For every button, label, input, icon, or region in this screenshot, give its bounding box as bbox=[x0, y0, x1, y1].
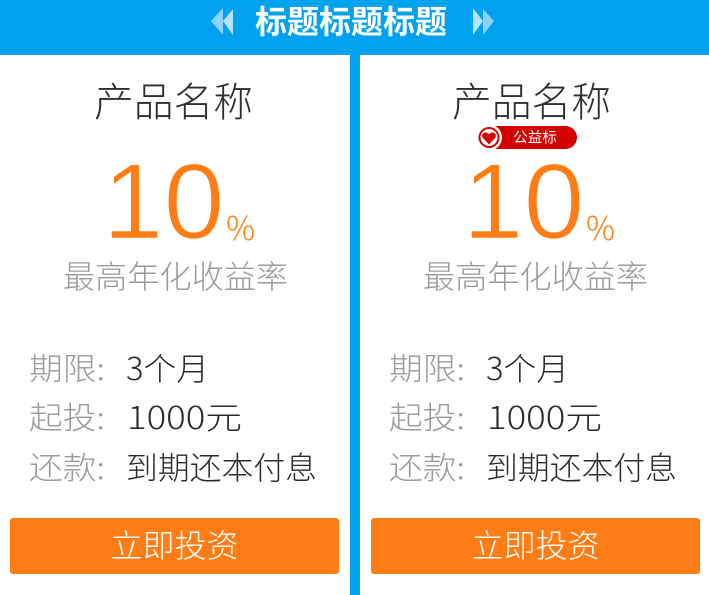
minimum investment row: 1000元 bbox=[487, 393, 602, 439]
rate value: 10 bbox=[102, 140, 224, 262]
product name: 产品名称 bbox=[452, 70, 611, 128]
percent sign: % bbox=[586, 202, 615, 250]
repayment row: 还款: bbox=[29, 443, 105, 488]
repayment row bbox=[29, 443, 317, 489]
minimum investment row: 起投: bbox=[389, 393, 465, 438]
percent sign: % bbox=[226, 202, 255, 250]
minimum investment row bbox=[29, 393, 242, 439]
center divider bbox=[350, 55, 360, 595]
rate caption: 最高年化收益率 bbox=[423, 252, 648, 298]
minimum investment row: 1000元 bbox=[127, 393, 242, 439]
icon: right double arrow bbox=[473, 8, 494, 35]
term row bbox=[389, 344, 569, 390]
icon: heart bbox=[482, 132, 496, 144]
term row bbox=[29, 344, 209, 390]
product name: 产品名称 bbox=[94, 70, 253, 128]
repayment row bbox=[389, 443, 677, 489]
minimum investment row bbox=[389, 393, 602, 439]
icon: left double arrow bbox=[211, 8, 233, 35]
term row: 期限: bbox=[29, 344, 105, 389]
repayment row: 到期还本付息 bbox=[126, 443, 317, 489]
rate value: 10 bbox=[462, 140, 584, 262]
panel: right product bbox=[371, 70, 700, 574]
invest button bbox=[371, 518, 700, 574]
repayment row: 到期还本付息 bbox=[486, 443, 677, 489]
term row: 3个月 bbox=[126, 344, 209, 390]
charity badge bbox=[476, 124, 577, 150]
invest button bbox=[10, 518, 339, 574]
header bar bbox=[0, 0, 709, 55]
badge label: 公益标 bbox=[513, 126, 557, 148]
minimum investment row: 起投: bbox=[29, 393, 105, 438]
term row: 期限: bbox=[389, 344, 465, 389]
invest button: 立即投资 bbox=[471, 521, 600, 567]
rate caption: 最高年化收益率 bbox=[63, 252, 288, 298]
invest button: 立即投资 bbox=[110, 521, 239, 567]
panel: left product bbox=[10, 70, 339, 574]
term row: 3个月 bbox=[486, 344, 569, 390]
repayment row: 还款: bbox=[389, 443, 465, 488]
